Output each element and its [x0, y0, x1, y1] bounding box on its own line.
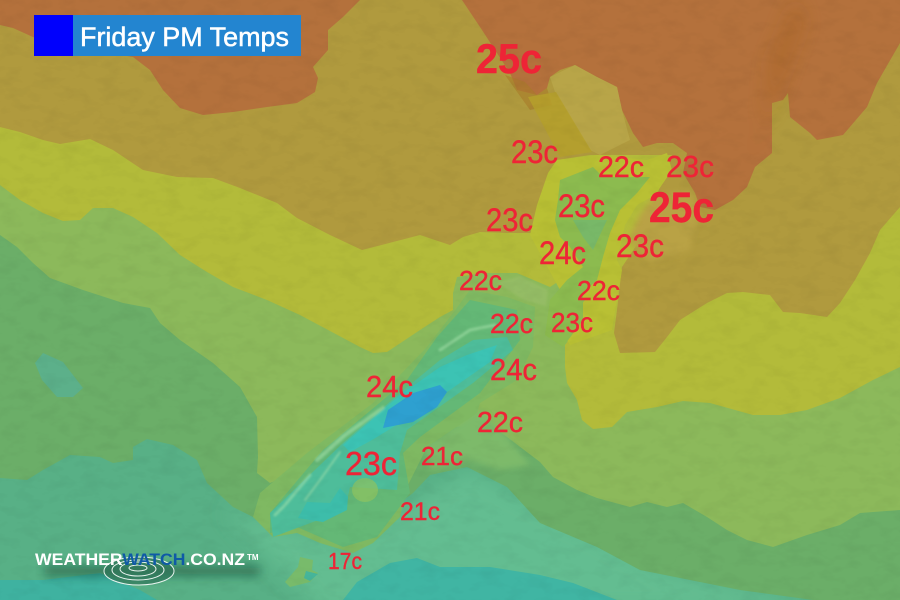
banner title: Friday PM Temps: [80, 22, 289, 52]
label 23c: 23c: [558, 188, 605, 224]
label 22c: 22c: [598, 151, 644, 184]
title banner: [34, 15, 301, 56]
banner bar: [73, 15, 301, 56]
label 21c: 21c: [400, 498, 440, 526]
label 22c: 22c: [577, 275, 620, 306]
logo wordmark: WEATHERWATCH.CO.NZ: [35, 550, 245, 569]
label 24c: 24c: [539, 235, 586, 271]
North Island land colouring: [497, 65, 672, 347]
label 17c: 17c: [328, 548, 362, 574]
label 24c: 24c: [490, 352, 537, 387]
label 23c: 23c: [486, 202, 533, 238]
label 23c: 23c: [616, 228, 664, 264]
label 22c: 22c: [490, 308, 533, 339]
WeatherWatch logo: [35, 550, 260, 585]
label 21c: 21c: [421, 441, 463, 471]
banner blue square: [34, 15, 74, 56]
label 22c: 22c: [477, 407, 523, 439]
South Island land colouring: [253, 290, 535, 587]
label 23c: 23c: [551, 307, 593, 338]
alpine snow highlights: [275, 325, 495, 515]
label 23c: 23c: [511, 134, 558, 170]
label 22c: 22c: [459, 265, 502, 296]
label 25c east: 25c: [649, 184, 714, 232]
label 23c: 23c: [345, 445, 397, 482]
logo trademark: TM: [247, 553, 259, 562]
label 23c: 23c: [666, 149, 714, 184]
logo ripple icon: [104, 557, 174, 585]
logo shadow: [45, 567, 260, 575]
temperature labels: [328, 35, 714, 574]
label 25c top: 25c: [476, 35, 542, 82]
label 24c: 24c: [366, 369, 413, 404]
